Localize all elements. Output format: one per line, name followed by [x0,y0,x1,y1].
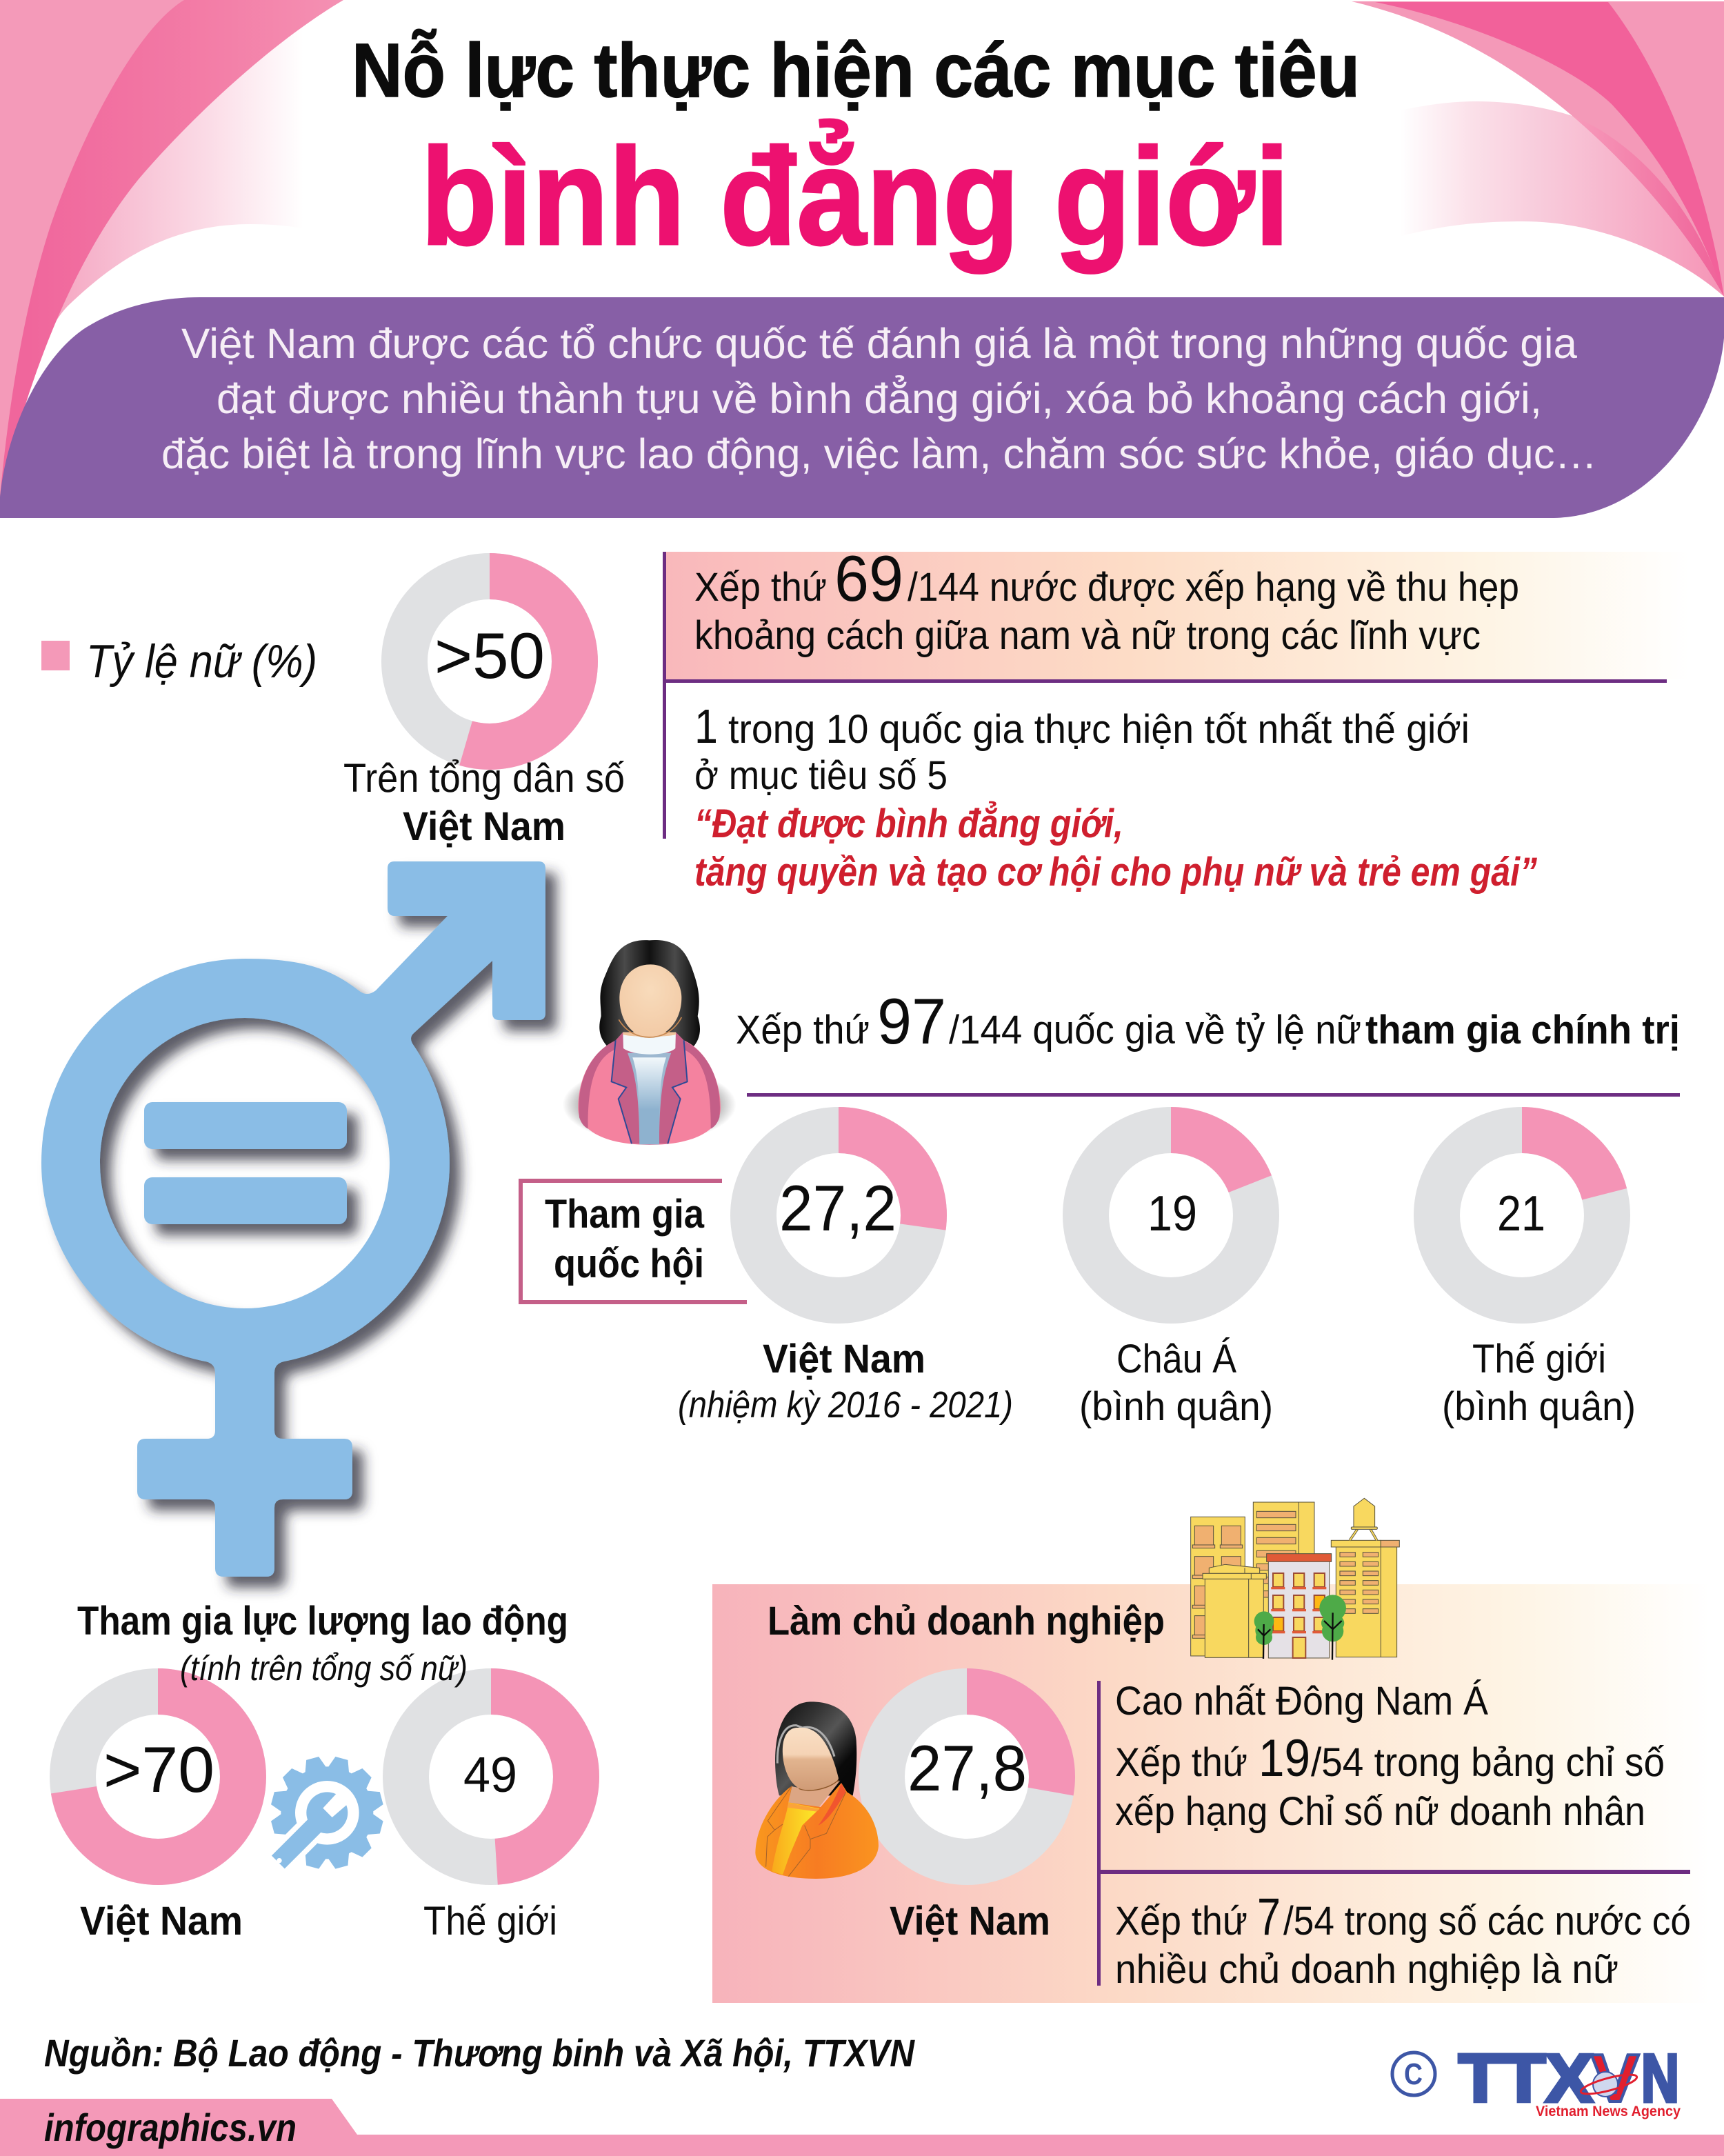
ranking: women in politics [736,985,1680,1097]
source: Nguồn: Bộ Lao động - Thương binh và Xã hội, TTXVN [44,2031,915,2075]
panel: global ranking: Xếp thứ [694,565,827,610]
panel: intro band: Việt Nam được các tổ chức quốc tế đánh giá là một trong những quốc gia [181,320,1577,367]
donut: Asia parliament [1079,1130,1273,1429]
ranking: women in politics: tham gia chính trị [1365,1008,1680,1052]
donut: Asia parliament: 19 [1147,1186,1197,1241]
logo: TTXVN: V [1591,2040,1639,2116]
donut: world parliament: 21 [1497,1186,1545,1241]
donut: Vietnam labour: Việt Nam [80,1899,243,1944]
panel: business owners [712,1584,1710,2003]
title: bình đẳng giới [421,119,1290,274]
icon: woman in orange jacket [755,1701,879,1879]
left curtain [0,0,343,497]
panel: business owners: Cao nhất Đông Nam Á [1115,1679,1488,1724]
donut: world labour [405,1691,577,1944]
donut: world parliament [1437,1130,1636,1429]
right curtain [1352,1,1724,297]
panel: global ranking: ở mục tiêu số 5 [694,753,948,798]
panel: business owners: xếp hạng Chỉ số nữ doanh nhân [1115,1789,1645,1834]
panel: business owners: nhiều chủ doanh nghiệp là nữ [1115,1947,1618,1992]
logo: TTXVN: Vietnam News Agency [1536,2104,1681,2119]
donut: Asia parliament: Châu Á [1116,1337,1236,1381]
footer band: infographics.vn [44,2106,297,2149]
ranking: women in politics: /144 quốc gia về tỷ lệ nữ [949,1008,1361,1052]
label: participation in parliament: Tham gia [545,1192,705,1237]
panel: global ranking: 1 [694,699,718,753]
donut: Vietnam business owners: Việt Nam [890,1899,1050,1944]
donut: Vietnam business owners [881,1691,1052,1944]
logo: TTXVN [1392,2040,1681,2119]
logo: TTXVN: N [1641,2040,1679,2116]
legend: female share: Tỷ lệ nữ (%) [86,635,317,688]
panel: business owners: Làm chủ doanh nghiệp [768,1599,1165,1644]
panel: global ranking: khoảng cách giữa nam và nữ trong các lĩnh vực [694,613,1481,658]
panel: business owners: Xếp thứ [1115,1740,1247,1785]
ranking: women in politics: Xếp thứ [736,1008,870,1052]
donut: world parliament: (bình quân) [1442,1384,1636,1429]
logo: TTXVN: TTX [1459,2040,1593,2116]
panel: global ranking: trong 10 quốc gia thực hiện tốt nhất thế giới [728,707,1470,752]
donut: Vietnam labour [73,1691,243,1944]
icon: gear and wrench [270,1755,384,1870]
panel: global ranking: tăng quyền và tạo cơ hội cho phụ nữ và trẻ em gái” [694,850,1537,895]
ranking: women in politics: 97 [877,985,946,1057]
panel: intro band: đạt được nhiều thành tựu về bình đẳng giới, xóa bỏ khoảng cách giới, [217,375,1542,422]
footer band [0,2099,1724,2156]
donut: Vietnam labour: >70 [103,1733,214,1806]
label: participation in parliament [521,1181,747,1302]
label: participation in parliament: quốc hội [554,1241,704,1286]
donut: Vietnam parliament: (nhiệm kỳ 2016 - 2021) [678,1384,1013,1426]
heading: labour force: (tính trên tổng số nữ) [180,1649,468,1688]
panel: intro band [0,297,1724,518]
logo: TTXVN: C [1404,2057,1423,2091]
heading: labour force [77,1599,568,1688]
panel: business owners: 7 [1257,1888,1281,1946]
panel: global ranking: /144 nước được xếp hạng về thu hẹp [908,565,1519,610]
panel: business owners: /54 trong bảng chỉ số [1311,1740,1665,1785]
donut: Asia parliament: (bình quân) [1079,1384,1273,1429]
donut: Vietnam parliament: 27,2 [779,1172,896,1244]
icon: woman in pink jacket [563,940,736,1145]
panel: global ranking [663,542,1690,895]
panel: global ranking: “Đạt được bình đẳng giới, [694,801,1123,846]
donut: Vietnam parliament [678,1130,1013,1426]
donut: Vietnam business owners: 27,8 [908,1732,1027,1804]
donut: Vietnam population over 50: >50 [434,619,545,692]
title [352,28,1360,274]
donut: Vietnam parliament: Việt Nam [763,1337,925,1381]
title: Nỗ lực thực hiện các mục tiêu [352,28,1360,113]
donut: Vietnam population over 50 [343,577,625,849]
donut: Vietnam population over 50: Việt Nam [403,804,565,849]
donut: world parliament: Thế giới [1472,1337,1606,1381]
donut: world labour: 49 [463,1748,517,1803]
icon: gender equality symbol [41,861,545,1577]
heading: labour force: Tham gia lực lượng lao động [77,1599,568,1644]
donut: world labour: Thế giới [423,1899,557,1944]
panel: business owners: Xếp thứ [1115,1899,1247,1944]
panel: business owners: /54 trong số các nước có [1283,1899,1691,1944]
panel: business owners: 19 [1259,1729,1310,1788]
icon: city buildings [1191,1498,1399,1660]
panel: global ranking: 69 [834,542,903,615]
donut: Vietnam population over 50: Trên tổng dân số [343,756,625,801]
panel: intro band: đặc biệt là trong lĩnh vực lao động, việc làm, chăm sóc sức khỏe, giáo dục… [161,430,1597,477]
